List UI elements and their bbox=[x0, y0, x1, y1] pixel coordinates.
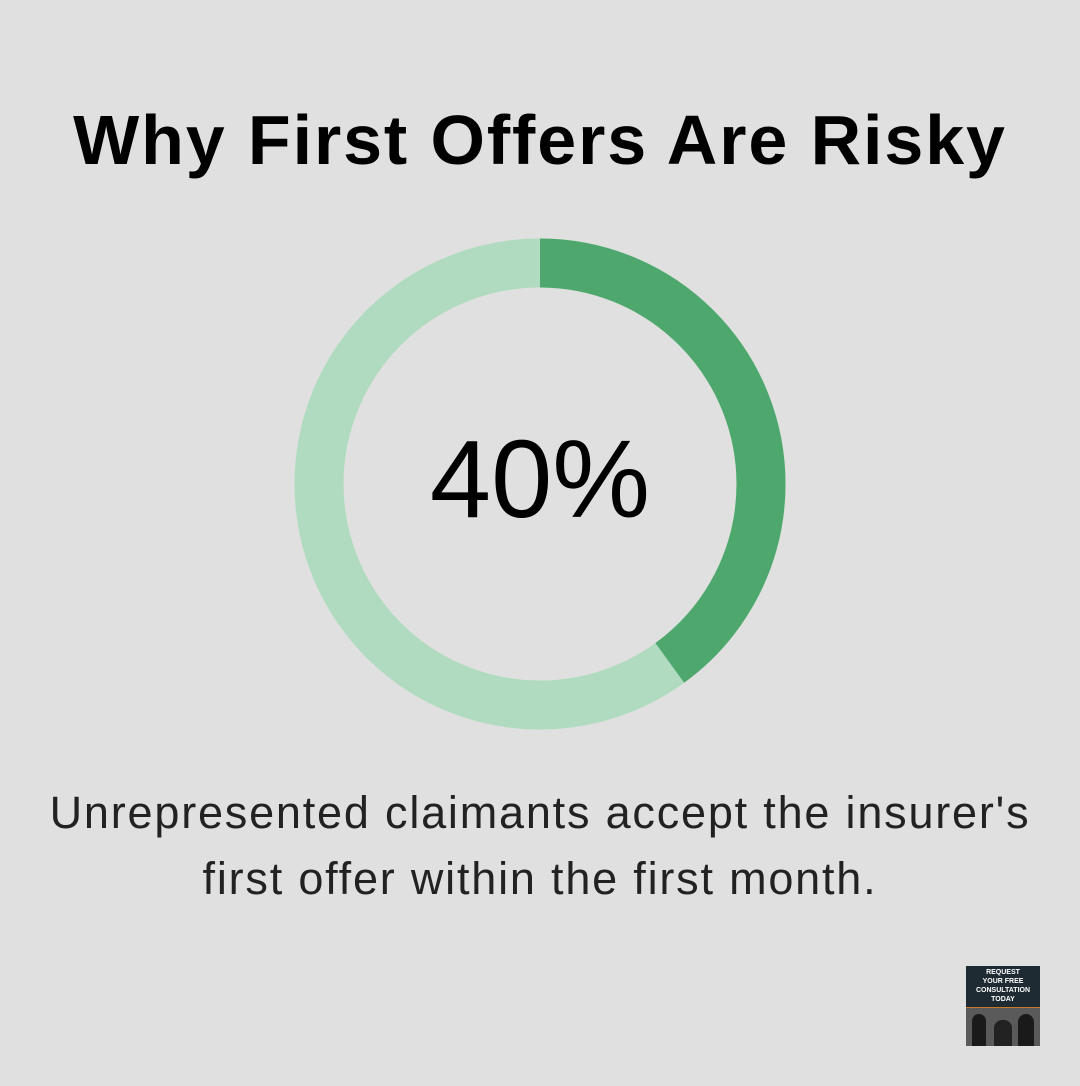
badge: consultation: TODAY bbox=[991, 996, 1015, 1003]
description: Unrepresented claimants accept the insurer's bbox=[50, 787, 1030, 838]
description: first offer within the first month. bbox=[203, 853, 877, 904]
percentage: 40% bbox=[430, 418, 650, 541]
badge: consultation: YOUR FREE bbox=[983, 978, 1023, 985]
badge: consultation: REQUEST bbox=[986, 969, 1020, 976]
description bbox=[50, 787, 1030, 904]
title: Why First Offers Are Risky bbox=[73, 101, 1007, 179]
badge: consultation bbox=[966, 966, 1040, 1046]
badge: consultation: CONSULTATION bbox=[976, 987, 1030, 994]
